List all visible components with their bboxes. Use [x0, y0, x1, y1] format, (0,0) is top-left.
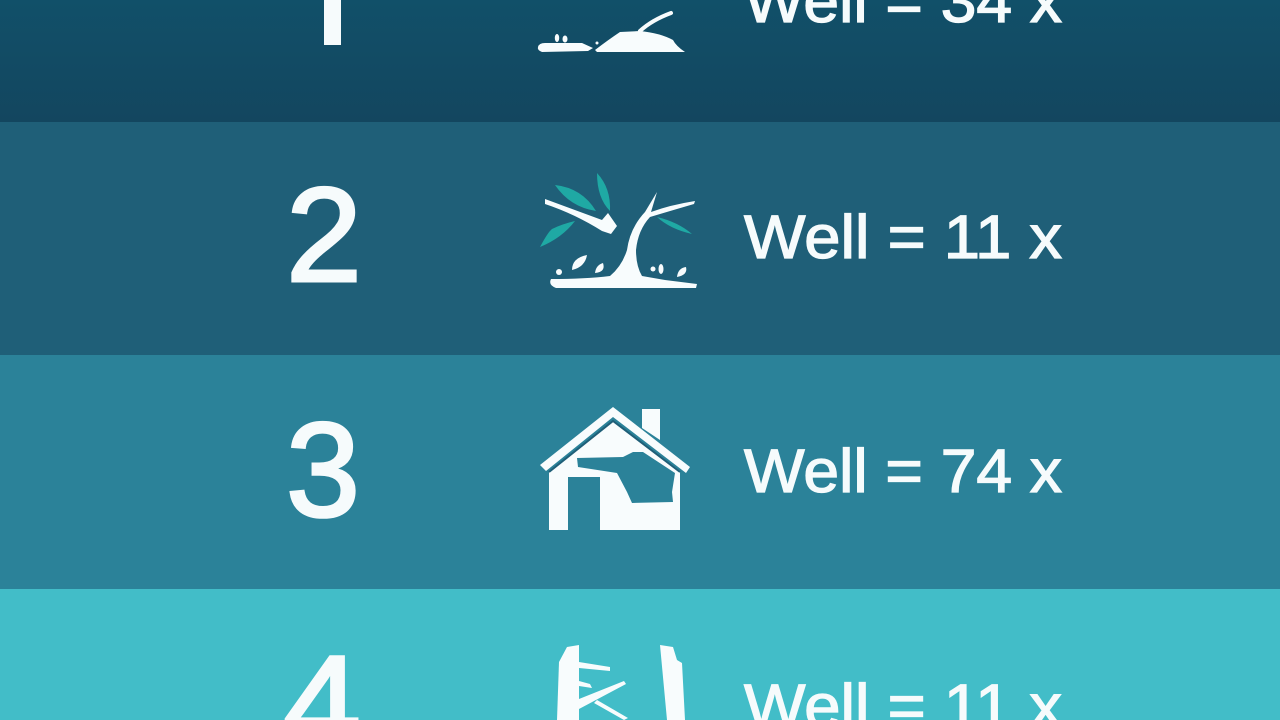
icon: damaged tree: [540, 173, 697, 288]
number 1: [324, 0, 341, 45]
panel: row 3: [0, 355, 1280, 589]
icon: damaged house: [540, 407, 690, 530]
number 3: 3: [286, 396, 360, 545]
panel: row 4: [0, 589, 1280, 720]
number 2: 2: [286, 161, 362, 310]
label: well 74: Well = 74 x: [744, 437, 1062, 505]
panel: row 2: [0, 122, 1280, 355]
label: well 11: Well = 11 x: [744, 203, 1062, 271]
panel: row 1: [324, 0, 1062, 52]
icon: broken tower: [557, 645, 685, 720]
icon: flattened debris mound: [538, 13, 685, 52]
